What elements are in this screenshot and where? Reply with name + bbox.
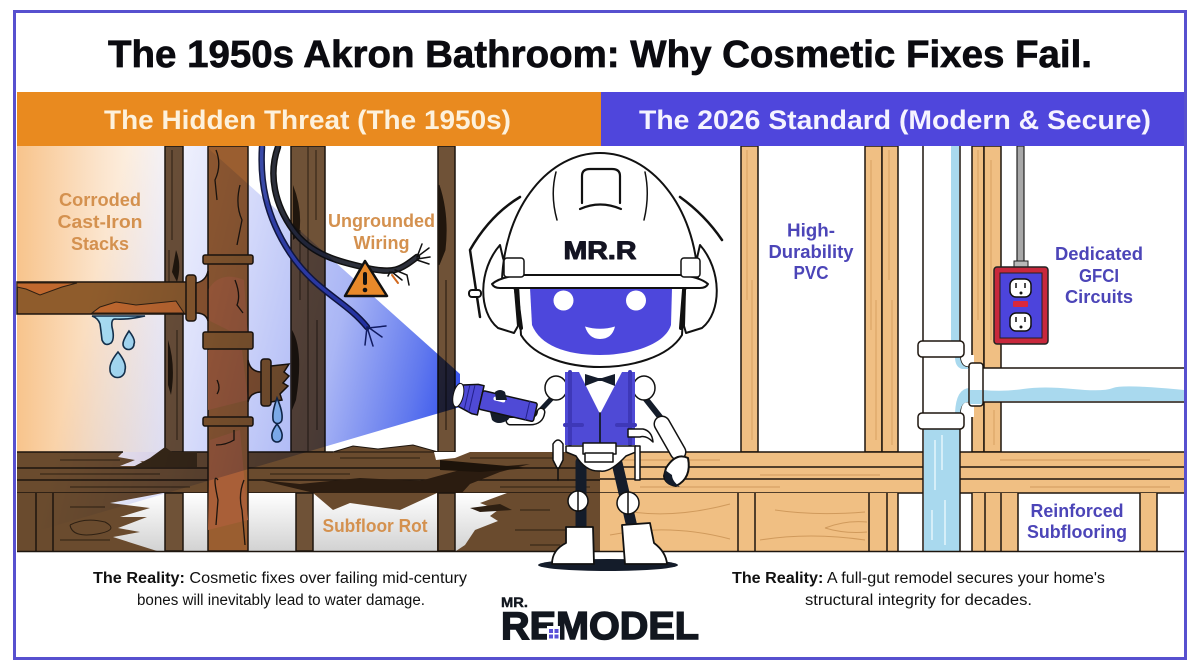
- text block: right reality: The Reality: A full-gut remodel secures your home's: [732, 570, 1105, 587]
- stud left 2: [291, 146, 325, 452]
- robot shoulders: [545, 376, 655, 400]
- mascot: Mr. R robot: [450, 153, 722, 571]
- robot knees: [568, 491, 639, 514]
- robot glove: [664, 456, 689, 486]
- reinforced subfloor: [600, 493, 1157, 551]
- label: reinforced subflooring: Subflooring: [1027, 522, 1127, 542]
- hard hat logo: MR.R: [564, 237, 636, 265]
- header: hidden threat: The Hidden Threat (The 1950s): [104, 105, 511, 135]
- label: high-durability PVC: PVC: [794, 263, 828, 283]
- robot tool belt: [553, 429, 653, 480]
- rotted floor beams left: [17, 445, 600, 500]
- label: dedicated GFCI circuits: GFCI: [1079, 266, 1119, 286]
- new wall studs: [741, 146, 1001, 452]
- robot shadow: [538, 559, 678, 571]
- PVC stack with water: [918, 146, 1184, 551]
- corroded horizontal pipe: [17, 275, 196, 321]
- new floor beams: [600, 452, 1184, 493]
- label: ungrounded wiring: Wiring: [354, 233, 410, 253]
- label: high-durability PVC: High-: [787, 220, 835, 240]
- label: dedicated GFCI circuits: [1055, 244, 1143, 307]
- text block: left reality: The Reality: Cosmetic fixes over failing mid-century: [93, 570, 467, 587]
- label: dedicated GFCI circuits: Circuits: [1065, 287, 1133, 307]
- rusted vertical stack: [196, 146, 289, 551]
- label: corroded cast-iron stacks: Cast-Iron: [58, 212, 142, 232]
- subfloor left: [17, 493, 600, 551]
- label: high-durability PVC: [768, 220, 854, 283]
- robot face: [530, 286, 672, 355]
- warning triangle: [345, 261, 387, 296]
- label: corroded cast-iron stacks: [58, 190, 142, 254]
- title: The 1950s Akron Bathroom: Why Cosmetic Fixes Fail.: [108, 34, 1092, 76]
- GFCI outlet and conduit: [994, 146, 1048, 344]
- header: 2026 standard: [601, 92, 1184, 146]
- text block: right reality: [732, 570, 1105, 609]
- scene baseline: [17, 550, 1184, 552]
- stud grain: [747, 150, 994, 445]
- robot vest: [565, 372, 635, 445]
- robot head: [518, 285, 685, 367]
- label: reinforced subflooring: Reinforced: [1030, 501, 1124, 521]
- logo window: [547, 626, 560, 641]
- logo: Mr. Remodel: MR.: [501, 595, 528, 610]
- exposed wiring: [262, 147, 430, 346]
- panel: right scene, the 2026 standard: [600, 146, 1184, 551]
- label: corroded cast-iron stacks: Corroded: [59, 190, 141, 210]
- stud left 3: [438, 146, 455, 452]
- robot hand: [490, 405, 511, 423]
- panel: left scene, the hidden threat: [17, 132, 600, 551]
- water drips left: [92, 316, 282, 442]
- text block: right reality: structural integrity for decades.: [805, 592, 1032, 609]
- label: subfloor rot: Subfloor Rot: [322, 516, 428, 536]
- flashlight: [450, 379, 539, 428]
- label: reinforced subflooring: [1027, 501, 1127, 542]
- flashlight beam: [17, 132, 460, 537]
- robot ear muffs: [469, 197, 722, 333]
- logo: Mr. Remodel: REMODEL: [501, 605, 699, 648]
- robot boots: [552, 523, 667, 564]
- label: corroded cast-iron stacks: Stacks: [71, 234, 129, 254]
- robot legs: [581, 462, 632, 527]
- text block: left reality: [93, 570, 467, 609]
- stud left 1: [165, 146, 183, 452]
- robot hard hat: [492, 153, 708, 288]
- robot arms: [510, 398, 678, 452]
- header: 2026 standard: The 2026 Standard (Modern & Secure): [639, 105, 1151, 135]
- label: ungrounded wiring: [328, 211, 435, 253]
- label: high-durability PVC: Durability: [768, 242, 854, 262]
- label: dedicated GFCI circuits: Dedicated: [1055, 244, 1143, 264]
- robot thumb: [495, 390, 507, 400]
- label: ungrounded wiring: Ungrounded: [328, 211, 435, 231]
- header: hidden threat: [17, 92, 601, 146]
- text block: left reality: bones will inevitably lead to water damage.: [137, 592, 425, 609]
